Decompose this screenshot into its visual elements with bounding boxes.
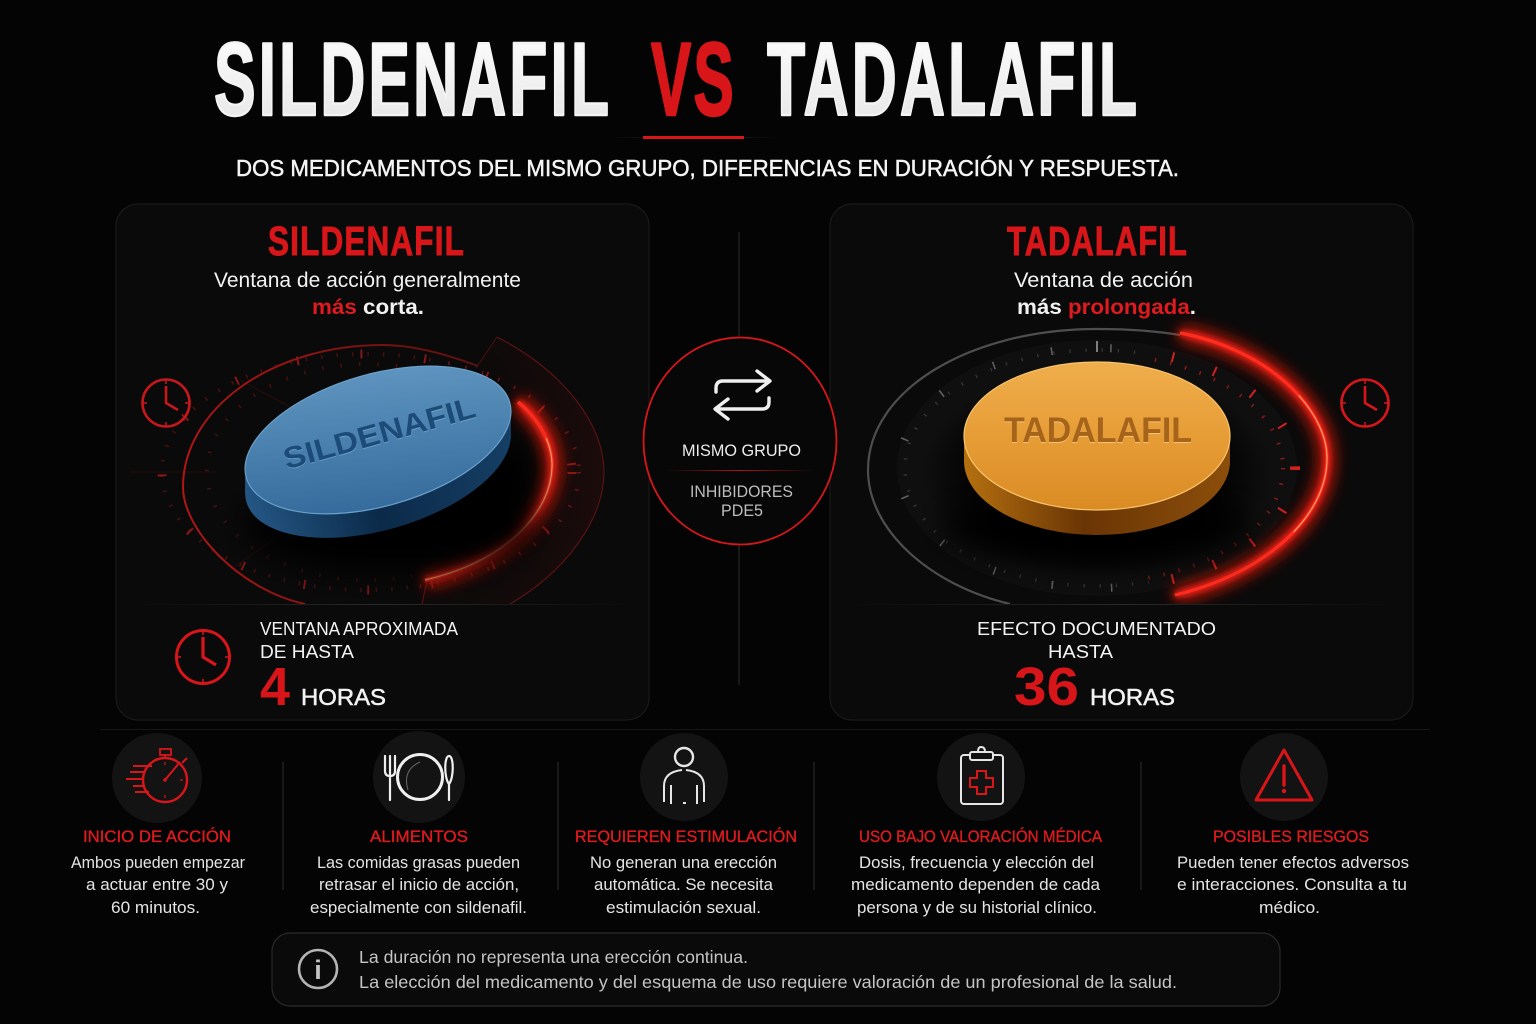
heading: USO BAJO VALORACIÓN MÉDICA	[859, 827, 1103, 846]
icon: plate and cutlery	[373, 731, 465, 823]
body text: médico.	[1259, 899, 1320, 917]
title: SILDENAFIL	[214, 22, 612, 138]
pill: sildenafil: SILDENAFIL	[280, 391, 479, 476]
body text: a actuar entre 30 y	[86, 876, 229, 894]
pill: tadalafil: TADALAFIL	[1004, 411, 1192, 450]
body text	[1177, 854, 1409, 917]
body text: automática. Se necesita	[594, 876, 774, 894]
label: mismo grupo: MISMO GRUPO	[682, 441, 801, 460]
description: sildenafil window: más corta.	[312, 296, 424, 319]
column: valoracion medica	[851, 733, 1103, 917]
heading: POSIBLES RIESGOS	[1213, 827, 1369, 846]
description: sildenafil window: Ventana de acción generalmente	[214, 269, 521, 292]
subtitle: DOS MEDICAMENTOS DEL MISMO GRUPO, DIFERENCIAS EN DURACIÓN Y RESPUESTA.	[236, 155, 1179, 181]
description: sildenafil window	[214, 269, 521, 319]
body text: No generan una erección	[590, 854, 777, 872]
label: inhibidores pde5	[690, 482, 793, 520]
icon: person	[640, 733, 728, 821]
stat: 36 hours: 36	[1014, 657, 1079, 717]
panel: sildenafil	[116, 204, 649, 720]
body text	[590, 854, 777, 917]
callout: disclaimer	[272, 933, 1280, 1006]
stat: 4 hours	[260, 618, 459, 717]
icon: clipboard	[937, 733, 1025, 821]
body text: medicamento dependen de cada	[851, 876, 1101, 894]
icon: swap arrows	[715, 371, 770, 419]
panel: tadalafil	[830, 204, 1413, 720]
description: tadalafil window: Ventana de acción	[1014, 269, 1193, 292]
body text: Dosis, frecuencia y elección del	[859, 854, 1094, 872]
body text: estimulación sexual.	[606, 899, 761, 917]
icon: clock left	[142, 380, 190, 426]
pill: sildenafil: SILDENAFIL	[280, 392, 480, 477]
body text: 60 minutos.	[111, 899, 200, 917]
body text: retrasar el inicio de acción,	[319, 876, 519, 894]
icon: clock duration	[176, 630, 230, 684]
body text	[310, 854, 527, 917]
stat: 4 hours: VENTANA APROXIMADA	[260, 618, 459, 639]
column: posibles riesgos	[1177, 733, 1409, 917]
stat: 36 hours: EFECTO DOCUMENTADO	[977, 618, 1216, 639]
body text: e interacciones. Consulta a tu	[1177, 876, 1407, 894]
heading: INICIO DE ACCIÓN	[83, 827, 231, 846]
stat: 36 hours	[977, 618, 1216, 717]
heading: sildenafil: SILDENAFIL	[268, 218, 465, 264]
disclaimer text: La elección del medicamento y del esquema de uso requiere valoración de un profesional de la salud.	[359, 972, 1177, 992]
badge: mismo grupo	[644, 338, 836, 544]
pill: tadalafil: TADALAFIL	[1004, 412, 1192, 451]
icon: stopwatch	[112, 733, 202, 823]
stat: 36 hours: HASTA	[1048, 641, 1114, 662]
stat: 4 hours: DE HASTA	[260, 641, 355, 662]
body text	[851, 854, 1101, 917]
icon: clock right	[1342, 380, 1388, 426]
dial: sildenafil	[130, 337, 604, 604]
stat: 4 hours: 4	[260, 657, 290, 717]
title: VS	[651, 22, 736, 138]
label: inhibidores pde5: PDE5	[721, 501, 763, 520]
column: inicio de accion	[71, 733, 245, 917]
body text: Pueden tener efectos adversos	[1177, 854, 1409, 872]
heading: ALIMENTOS	[370, 827, 468, 846]
description: tadalafil window	[1014, 269, 1196, 319]
icon: warning triangle	[1240, 733, 1328, 821]
disclaimer text	[359, 947, 1177, 992]
stat: 4 hours: HORAS	[301, 684, 386, 710]
pill: sildenafil	[228, 339, 538, 575]
body text	[71, 854, 245, 917]
column: requieren estimulacion	[575, 733, 797, 917]
label: inhibidores pde5: INHIBIDORES	[690, 482, 793, 501]
body text: Ambos pueden empezar	[71, 854, 245, 872]
icon: info: i	[314, 955, 322, 985]
icon: info	[299, 950, 337, 988]
heading: tadalafil: TADALAFIL	[1007, 218, 1188, 264]
heading: REQUIEREN ESTIMULACIÓN	[575, 827, 797, 846]
disclaimer text: La duración no representa una erección continua.	[359, 947, 748, 967]
body text: persona y de su historial clínico.	[857, 899, 1097, 917]
body text: especialmente con sildenafil.	[310, 899, 527, 917]
dial: tadalafil	[868, 329, 1327, 604]
column: alimentos	[310, 731, 527, 917]
title: TADALAFIL	[767, 22, 1140, 138]
body text: Las comidas grasas pueden	[317, 854, 520, 872]
description: tadalafil window: más prolongada .	[1017, 296, 1196, 319]
stat: 36 hours: HORAS	[1090, 684, 1175, 710]
pill: tadalafil	[942, 362, 1252, 565]
